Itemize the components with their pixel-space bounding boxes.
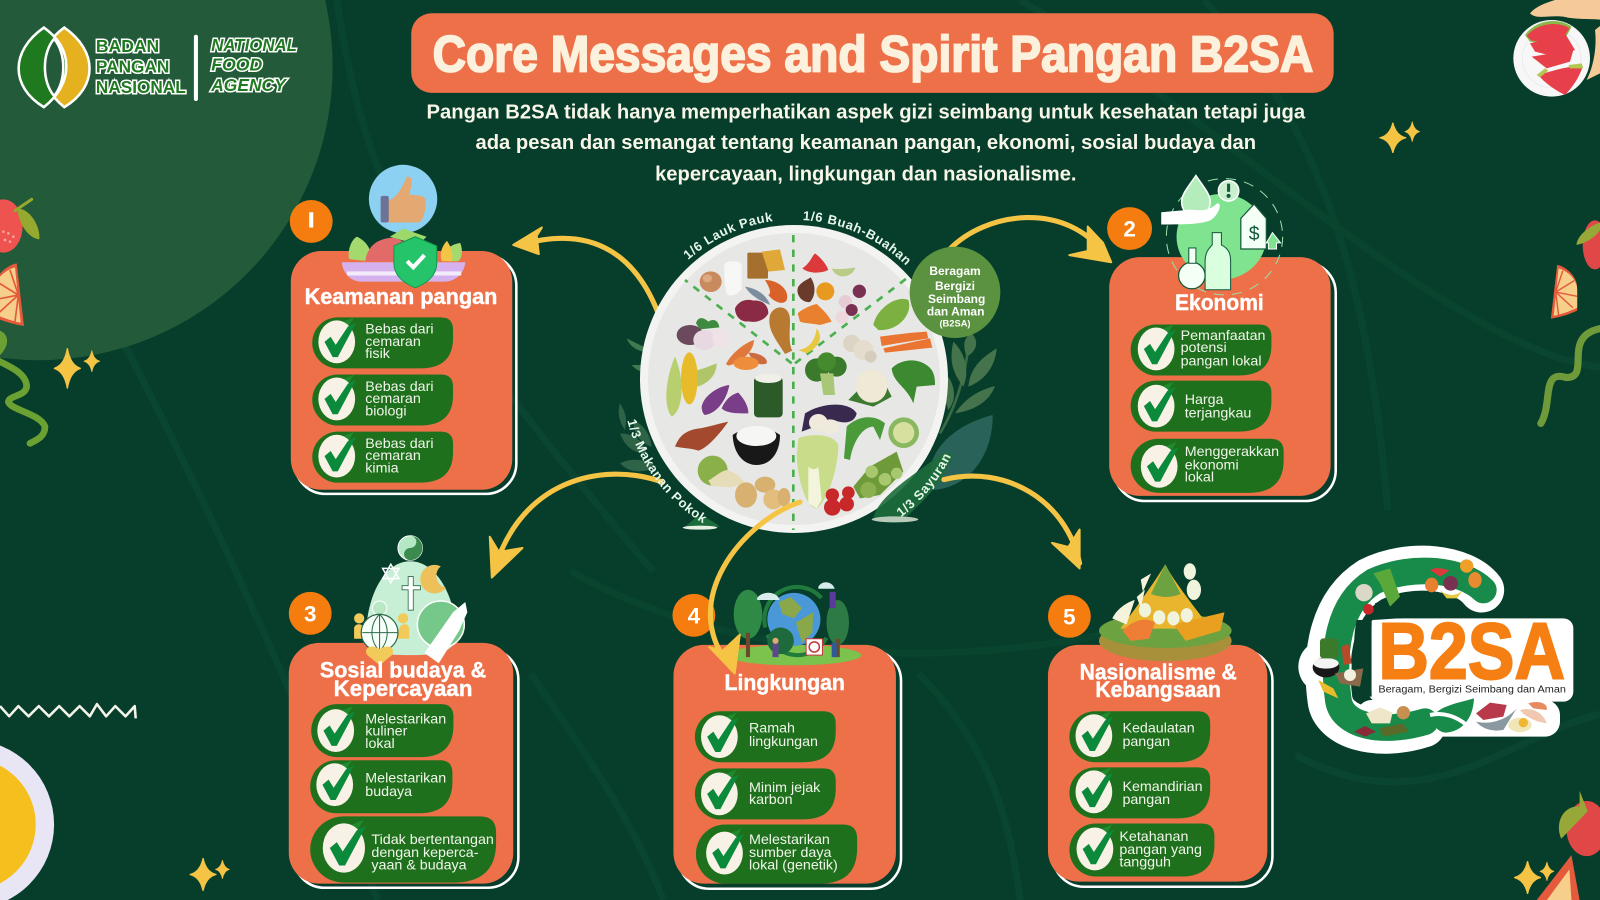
item: Melestarikan kuliner lokal: kuliner: [365, 724, 408, 740]
heading: Sosial budaya &: [320, 658, 486, 683]
item: Harga terjangkau: terjangkau: [1185, 405, 1251, 421]
item: Bebas dari cemaran kimia: Bebas dari: [365, 436, 434, 452]
decor: watermelon plate top right: [1513, 0, 1600, 97]
item: Bebas dari cemaran fisik: [312, 317, 453, 368]
number badge 2: 2: [1123, 217, 1136, 242]
item: Bebas dari cemaran biologi: [312, 374, 453, 426]
panel 1: Keamanan pangan: [291, 165, 516, 494]
heading: [1080, 660, 1237, 702]
number badge 5: [1048, 595, 1091, 638]
item: Melestarikan sumber daya lokal (genetik): sumber daya: [749, 845, 832, 861]
item: Tidak bertentangan dengan kepercayaan & budaya: Tidak bertentangan: [371, 832, 494, 848]
heading: Ekonomi: [1175, 290, 1264, 315]
arrow to card 2: [949, 218, 1111, 262]
item: Melestarikan budaya: Melestarikan: [365, 771, 446, 787]
arrow to card 4: [709, 502, 800, 673]
sayuran foods: [797, 299, 935, 516]
item: Melestarikan kuliner lokal: Melestarikan: [365, 711, 446, 727]
B2SA badge: (B2SA): [939, 319, 971, 329]
item: Bebas dari cemaran kimia: kimia: [365, 460, 399, 476]
icon: environment: [727, 582, 861, 665]
panel 2: Ekonomi: [1109, 176, 1336, 501]
panel 5: Nasionalisme & Kebangsaan: [1048, 563, 1272, 887]
item: Tidak bertentangan dengan kepercayaan & budaya: [310, 816, 496, 883]
intro text: [427, 101, 1306, 186]
item: Kedaulatan pangan: pangan: [1122, 734, 1170, 750]
title banner: Core Messages and Spirit Pangan B2SA: [433, 25, 1313, 82]
item: Ketahanan pangan yang tangguh: [1069, 823, 1214, 877]
number badge 4: [672, 594, 715, 637]
heading: Kepercayaan: [334, 676, 472, 701]
item: Bebas dari cemaran kimia: cemaran: [365, 448, 421, 464]
B2SA logo sticker: [1298, 559, 1573, 737]
item: Melestarikan kuliner lokal: [311, 704, 453, 757]
item: Bebas dari cemaran kimia: [312, 432, 453, 483]
item: Bebas dari cemaran biologi: cemaran: [365, 391, 421, 407]
item: Menggerakkan ekonomi lokal: ekonomi: [1185, 457, 1239, 473]
B2SA badge: Seimbang: [928, 292, 985, 306]
plate section label: sayuran: 1/3 Sayuran: [897, 454, 951, 517]
item: Menggerakkan ekonomi lokal: Menggerakkan: [1185, 444, 1279, 460]
item: Ketahanan pangan yang tangguh: pangan yang: [1119, 842, 1202, 858]
intro text: ada pesan dan semangat tentang keamanan pangan, ekonomi, sosial budaya dan: [476, 132, 1256, 154]
panel 4: Lingkungan: [673, 582, 901, 889]
item: Pemanfaatan potensi pangan lokal: pangan lokal: [1181, 353, 1262, 369]
plate of food: [628, 211, 1000, 533]
icon: economy: [1161, 176, 1283, 295]
decor: yellow plate bottom left: [0, 740, 54, 900]
wordmark: B2SA: [1378, 606, 1565, 695]
heading: [320, 658, 486, 701]
item: Kedaulatan pangan: Kedaulatan: [1122, 721, 1195, 737]
item: Melestarikan sumber daya lokal (genetik): [696, 824, 857, 884]
item: Kemandirian pangan: pangan: [1122, 792, 1170, 808]
icon: food safety: [342, 165, 465, 288]
B2SA badge: dan Aman: [927, 304, 984, 318]
logo: Badan Pangan Nasional: AGENCY: [210, 75, 288, 95]
plate section label: buah-buahan: 1/6 Buah-Buahan: [803, 211, 910, 266]
item: Melestarikan sumber daya lokal (genetik): lokal (genetik): [749, 857, 838, 873]
item: Pemanfaatan potensi pangan lokal: [1131, 324, 1271, 376]
arrow to card 5: [944, 476, 1080, 568]
plate section label: makanan pokok: 1/3 Makanan Pokok: [628, 419, 707, 524]
heading: Kebangsaan: [1095, 677, 1221, 702]
item: Pemanfaatan potensi pangan lokal: potensi: [1181, 340, 1227, 356]
item: Ketahanan pangan yang tangguh: tangguh: [1119, 854, 1171, 870]
intro text: Pangan B2SA tidak hanya memperhatikan aspek gizi seimbang untuk kesehatan tetapi juga: [427, 101, 1306, 123]
buah foods: [797, 253, 866, 353]
title banner: [411, 13, 1334, 93]
item: Minim jejak karbon: Minim jejak: [749, 780, 821, 796]
arrow to card 3: [490, 474, 661, 578]
logo: Badan Pangan Nasional: NASIONAL: [96, 77, 186, 97]
item: Melestarikan kuliner lokal: lokal: [365, 736, 395, 752]
heading: Keamanan pangan: [305, 284, 497, 309]
item: Kemandirian pangan: Kemandirian: [1122, 779, 1203, 795]
B2SA badge: [910, 247, 1000, 338]
item: Bebas dari cemaran fisik: cemaran: [365, 334, 421, 350]
logo food illustrations: [1313, 559, 1547, 737]
decor: zigzag: [0, 704, 136, 718]
logo: Badan Pangan Nasional: FOOD: [211, 54, 262, 74]
item: Minim jejak karbon: [695, 768, 836, 819]
plate dividers: [685, 235, 907, 530]
item: Pemanfaatan potensi pangan lokal: Pemanfaatan: [1181, 328, 1265, 344]
icon: religion and culture: [354, 536, 467, 665]
number badge 1: [290, 200, 333, 243]
number badge 2: [1107, 207, 1152, 250]
item: Bebas dari cemaran fisik: fisik: [365, 346, 391, 362]
item: Ramah lingkungan: lingkungan: [749, 734, 818, 750]
panel 3: Sosial budaya & Kepercayaan: [289, 536, 518, 888]
heading: Lingkungan: [724, 670, 845, 695]
number badge 3: 3: [304, 601, 316, 626]
tagline: Beragam, Bergizi Seimbang dan Aman: [1378, 685, 1566, 696]
arrow to card 1: [513, 228, 658, 313]
number badge 3: [289, 592, 332, 635]
B2SA badge: Bergizi: [935, 279, 975, 293]
B2SA badge: Beragam: [929, 264, 981, 278]
icon: tumpeng: [1099, 563, 1232, 661]
item: Melestarikan sumber daya lokal (genetik): Melestarikan: [749, 832, 830, 848]
decor: fruit bottom right: [1537, 791, 1600, 900]
logo: Badan Pangan Nasional: PANGAN: [96, 56, 169, 76]
decor: fruit left: [0, 199, 45, 443]
item: Kemandirian pangan: [1069, 767, 1210, 818]
lauk pauk foods: [700, 249, 792, 354]
item: Harga terjangkau: Harga: [1185, 392, 1224, 408]
number badge 4: 4: [688, 603, 701, 628]
item: Ketahanan pangan yang tangguh: Ketahanan: [1119, 829, 1188, 845]
decorative leaves behind plate: [619, 333, 997, 490]
heading: Nasionalisme &: [1080, 660, 1237, 685]
item: Melestarikan budaya: budaya: [365, 784, 412, 800]
item: Ramah lingkungan: Ramah: [749, 721, 795, 737]
item: Bebas dari cemaran biologi: Bebas dari: [365, 379, 434, 395]
ribbons under plate labels: [683, 452, 953, 530]
intro text: kepercayaan, lingkungan dan nasionalisme.: [655, 164, 1077, 186]
item: Harga terjangkau: [1131, 381, 1271, 432]
item: Bebas dari cemaran biologi: biologi: [365, 403, 407, 419]
background circle: [0, 0, 333, 360]
decor: squiggle right: [1541, 329, 1600, 423]
item: Melestarikan budaya: [310, 760, 452, 813]
logo: Badan Pangan Nasional: [19, 28, 297, 107]
logo: Badan Pangan Nasional: NATIONAL: [211, 35, 297, 55]
makanan pokok foods: [666, 318, 790, 509]
item: Tidak bertentangan dengan kepercayaan & budaya: dengan keperca-: [371, 845, 479, 861]
item: Minim jejak karbon: karbon: [749, 792, 793, 808]
item: Tidak bertentangan dengan kepercayaan & budaya: yaan & budaya: [371, 857, 467, 873]
item: Menggerakkan ekonomi lokal: [1131, 439, 1284, 493]
item: Bebas dari cemaran fisik: Bebas dari: [365, 322, 434, 338]
plate section label: lauk pauk: 1/6 Lauk Pauk: [684, 212, 773, 260]
number badge 5: 5: [1063, 604, 1076, 629]
item: Ramah lingkungan: [695, 711, 836, 762]
decor: fruit right: [1551, 220, 1600, 319]
icon: economy: $: [1249, 223, 1260, 245]
logo: Badan Pangan Nasional: BADAN: [96, 36, 159, 56]
item: Kedaulatan pangan: [1069, 711, 1210, 762]
item: Menggerakkan ekonomi lokal: lokal: [1185, 470, 1214, 486]
